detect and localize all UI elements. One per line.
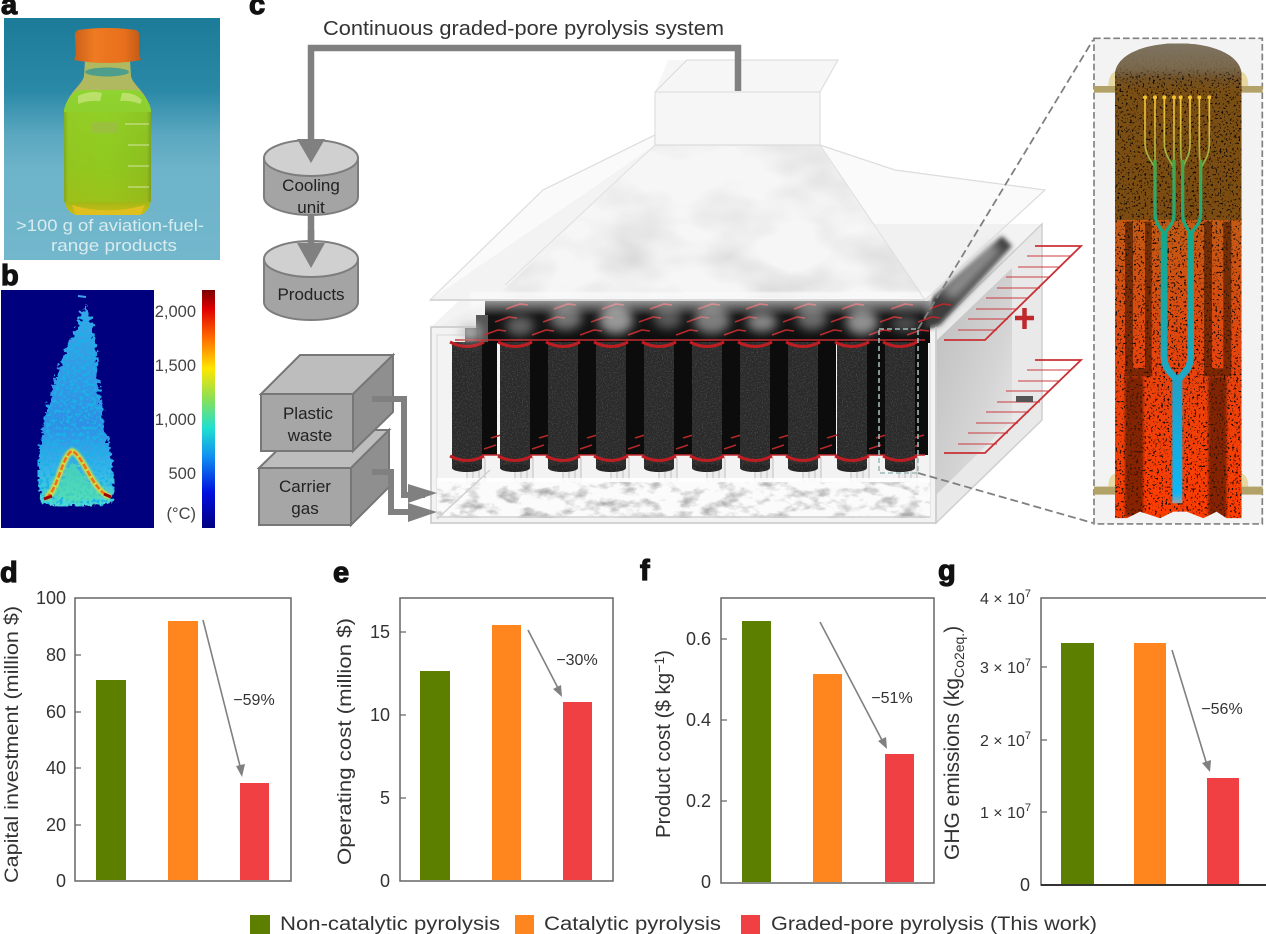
panel c: heading: Continuous graded-pore pyrolysis system	[323, 17, 724, 40]
arrowhead into cooling unit	[297, 139, 325, 163]
y tick labels g: 7	[1025, 657, 1031, 669]
caption: >100 g of aviation-fuel-	[16, 217, 204, 235]
panel label d: d	[0, 557, 18, 589]
axis title g: GHG emissions (kg	[941, 678, 964, 860]
y tick labels g	[980, 588, 1031, 895]
negative electrode comb	[944, 360, 1081, 453]
panel c detail: graded-pore column inset	[1094, 38, 1263, 524]
red wiring lines and rear electrodes	[455, 304, 951, 455]
icon: glass bottle of fuel	[64, 28, 151, 215]
y tick labels e: 0	[380, 871, 390, 891]
axis title f: )	[652, 650, 675, 657]
dark column rows behind	[465, 236, 1012, 455]
y tick labels g: 0	[1020, 875, 1030, 895]
graded flow channel tree	[1145, 97, 1209, 503]
colour bar scale labels	[155, 303, 196, 523]
reduction arrow d	[203, 620, 245, 777]
reduction label g: −56%	[1201, 701, 1243, 718]
y tick labels f: 0.2	[686, 791, 711, 811]
chart g: GHG emissions	[941, 588, 1266, 895]
y tick labels e: 10	[370, 705, 390, 725]
y tick labels d	[36, 588, 66, 891]
y tick labels d: 40	[46, 758, 66, 778]
reduction arrow g	[1172, 650, 1211, 772]
red heating rings	[450, 342, 917, 460]
panel label f: f	[640, 555, 650, 587]
pipe from cooling unit to products	[308, 216, 314, 250]
minus sign	[1016, 396, 1033, 402]
second level channels	[1155, 160, 1201, 237]
reduction arrow e	[528, 630, 562, 697]
y tick labels g: 4 × 10	[980, 591, 1025, 608]
caption: range products	[51, 237, 177, 255]
porous column body	[1115, 43, 1242, 520]
y tick labels f	[686, 629, 711, 892]
caption	[16, 217, 204, 255]
y tick labels g: 1 × 10	[980, 805, 1025, 822]
hood with pyrolysis vapour	[430, 60, 1045, 316]
y tick labels g: 7	[1025, 730, 1031, 742]
panel label e: e	[333, 557, 349, 589]
reactor front frame lower edge	[431, 327, 936, 523]
colour bar scale labels: 1,500	[155, 357, 196, 375]
colour bar scale labels: (°C)	[166, 505, 196, 523]
dashed zoom leader lines	[918, 40, 1093, 523]
reduction label f: −51%	[871, 690, 913, 707]
y tick labels d: 80	[46, 645, 66, 665]
plastic waste box	[261, 355, 393, 451]
carrier gas box	[259, 430, 389, 525]
panel label b: b	[1, 260, 19, 292]
y tick labels g: 2 × 10	[980, 733, 1025, 750]
y tick labels d: 0	[56, 871, 66, 891]
trunk channel	[1172, 380, 1182, 503]
bars e	[420, 625, 592, 880]
mounting brackets	[1094, 72, 1263, 495]
arrowhead into products	[297, 230, 325, 268]
carrier gas box: Carrier	[279, 477, 331, 496]
hood top box	[505, 60, 925, 300]
colour bar	[202, 290, 215, 528]
legend	[250, 914, 1097, 934]
products cylinder	[264, 241, 358, 320]
bottle cap	[74, 28, 141, 63]
chart d: capital investment	[2, 588, 291, 891]
axis title g: )	[941, 626, 964, 633]
axis title f: −1	[651, 657, 667, 673]
panel label g: g	[938, 555, 956, 587]
y tick labels g: 7	[1025, 588, 1031, 600]
y tick labels d: 100	[36, 588, 66, 608]
channel tip markers	[1143, 95, 1211, 99]
axis title e: Operating cost (million $)	[335, 618, 356, 865]
carrier gas cloud at reactor base	[437, 478, 930, 518]
plastic waste box: Plastic	[283, 404, 334, 423]
axis title d: Capital investment (million $)	[2, 606, 23, 883]
reactor front glass frame	[431, 327, 936, 523]
cooling unit cylinder	[264, 140, 358, 217]
cooling unit cylinder: Cooling	[282, 176, 340, 195]
reduction label e: −30%	[556, 652, 598, 669]
bars f	[742, 621, 914, 882]
photo background	[4, 18, 220, 260]
axis title g: Co2eq.	[951, 633, 967, 678]
carbon columns front row	[452, 342, 915, 472]
y tick labels f: 0.6	[686, 629, 711, 649]
flame shape	[38, 296, 114, 506]
reduction arrow f	[820, 622, 887, 749]
smoke above columns	[459, 242, 1003, 341]
axis title f: Product cost ($ kg	[652, 673, 675, 838]
y tick labels g: 7	[1025, 802, 1031, 814]
hood plate	[430, 135, 1045, 300]
cooling unit cylinder: unit	[297, 198, 325, 217]
y tick labels g: 3 × 10	[980, 660, 1025, 677]
y tick labels e	[370, 622, 390, 891]
colour bar scale labels: 1,000	[155, 411, 196, 429]
leaf channels	[1145, 97, 1209, 170]
chart f: product cost	[651, 598, 934, 892]
panel a: bottle photograph	[4, 18, 220, 260]
y tick labels d: 60	[46, 702, 66, 722]
colour bar scale labels: 500	[168, 465, 196, 483]
bottom column fixtures	[467, 458, 917, 482]
panel b: flame temperature map	[1, 290, 154, 528]
y tick labels e: 15	[370, 622, 390, 642]
pipe from hood to cooling unit	[311, 48, 738, 145]
y tick labels f: 0.4	[686, 710, 711, 730]
y tick labels f: 0	[701, 872, 711, 892]
dashed zoom selection on reactor	[879, 329, 918, 473]
y tick labels d: 20	[46, 815, 66, 835]
y tick labels e: 5	[380, 788, 390, 808]
carrier gas box: gas	[291, 499, 319, 518]
bars g	[1061, 643, 1239, 884]
plastic waste box: waste	[287, 426, 332, 445]
positive electrode comb	[944, 246, 1081, 340]
first level channels	[1164, 233, 1191, 383]
chart e: operating cost	[335, 598, 613, 891]
reduction label d: −59%	[233, 692, 275, 709]
feed pipes with arrowheads	[372, 399, 437, 522]
reactor: rear and side faces	[431, 224, 1042, 523]
plus sign	[1015, 308, 1034, 329]
colour bar scale labels: 2,000	[155, 303, 196, 321]
products cylinder: Products	[277, 285, 345, 304]
bars d	[96, 621, 269, 880]
